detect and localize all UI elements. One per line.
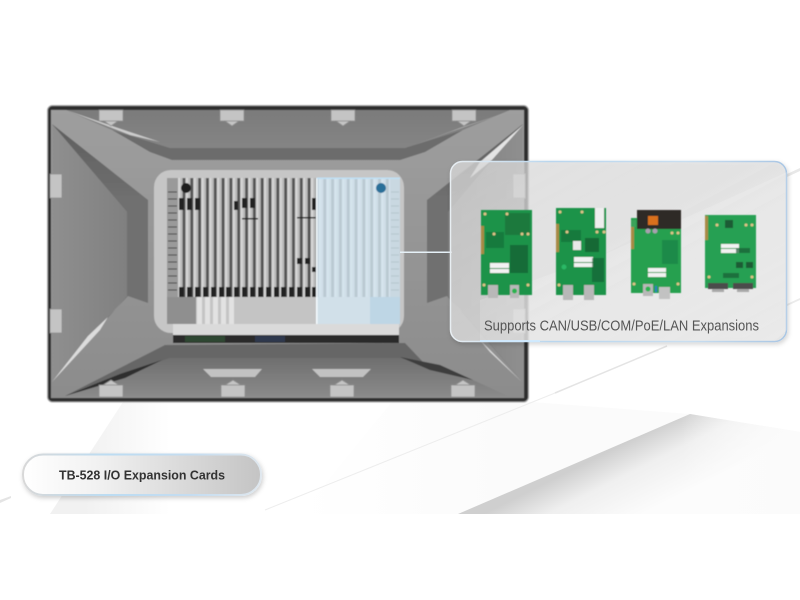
screw hole blue (376, 183, 386, 193)
right upper highlight wedge (470, 125, 523, 178)
background decorative shapes (0, 168, 800, 514)
slot green glow (185, 336, 225, 342)
pill label: TB-528 I/O Expansion Cards (59, 468, 225, 482)
lower light strip (173, 324, 399, 335)
COM card (705, 215, 756, 292)
vent slots (168, 192, 399, 290)
dark fin blocks (179, 198, 317, 272)
left lower highlight wedge (52, 317, 108, 382)
central bay (154, 170, 404, 333)
bottom dark band (65, 343, 473, 396)
device raised back surface (51, 110, 524, 398)
connector line (400, 252, 452, 253)
left recessed panel (52, 124, 127, 382)
device outer frame (48, 106, 528, 402)
pill background (23, 454, 261, 495)
lower block fin ribs (197, 297, 234, 324)
left dark band (52, 124, 148, 382)
bottom mounting clips (99, 380, 475, 397)
blue lower block shade (370, 297, 400, 324)
panel caption: Supports CAN/USB/COM/PoE/LAN Expansions (484, 318, 759, 334)
right recessed panel (448, 124, 523, 382)
bottom mounting plates (203, 369, 371, 377)
glass panel diagonal sheen (480, 172, 787, 341)
top mounting clips (99, 110, 476, 126)
screw hole black (181, 183, 191, 193)
highlight left glow edge (316, 178, 318, 324)
right vent column (390, 178, 400, 297)
top left highlight strip (66, 110, 160, 142)
glass panel background (450, 162, 786, 342)
title pill (23, 454, 261, 495)
top right highlight strip (412, 112, 508, 146)
heatsink lower block (167, 297, 400, 324)
CAN card (481, 210, 532, 298)
bottom recessed panel (65, 358, 508, 396)
side mounting clips (50, 174, 525, 333)
right dark band (427, 124, 523, 382)
top dark band (112, 130, 463, 160)
glass bottom glow (480, 340, 540, 342)
panel PC rear view (48, 106, 528, 402)
bottom fin notches (179, 287, 317, 297)
PoE card (631, 210, 681, 299)
lower block dark section (167, 297, 196, 324)
heatsink fins (178, 178, 400, 297)
slot blue glow (255, 336, 285, 342)
right lower highlight wedge (480, 340, 522, 382)
expansion cards glass panel (450, 162, 787, 342)
left vent column (167, 178, 178, 297)
bottom right shadow wedge (400, 357, 473, 380)
top recessed panel (66, 110, 510, 148)
highlight top glow edge (317, 178, 400, 179)
expansion slot blue highlight (317, 178, 400, 324)
lower slot (173, 335, 399, 343)
USB card (556, 208, 606, 300)
bottom left shadow wedge (65, 360, 162, 396)
